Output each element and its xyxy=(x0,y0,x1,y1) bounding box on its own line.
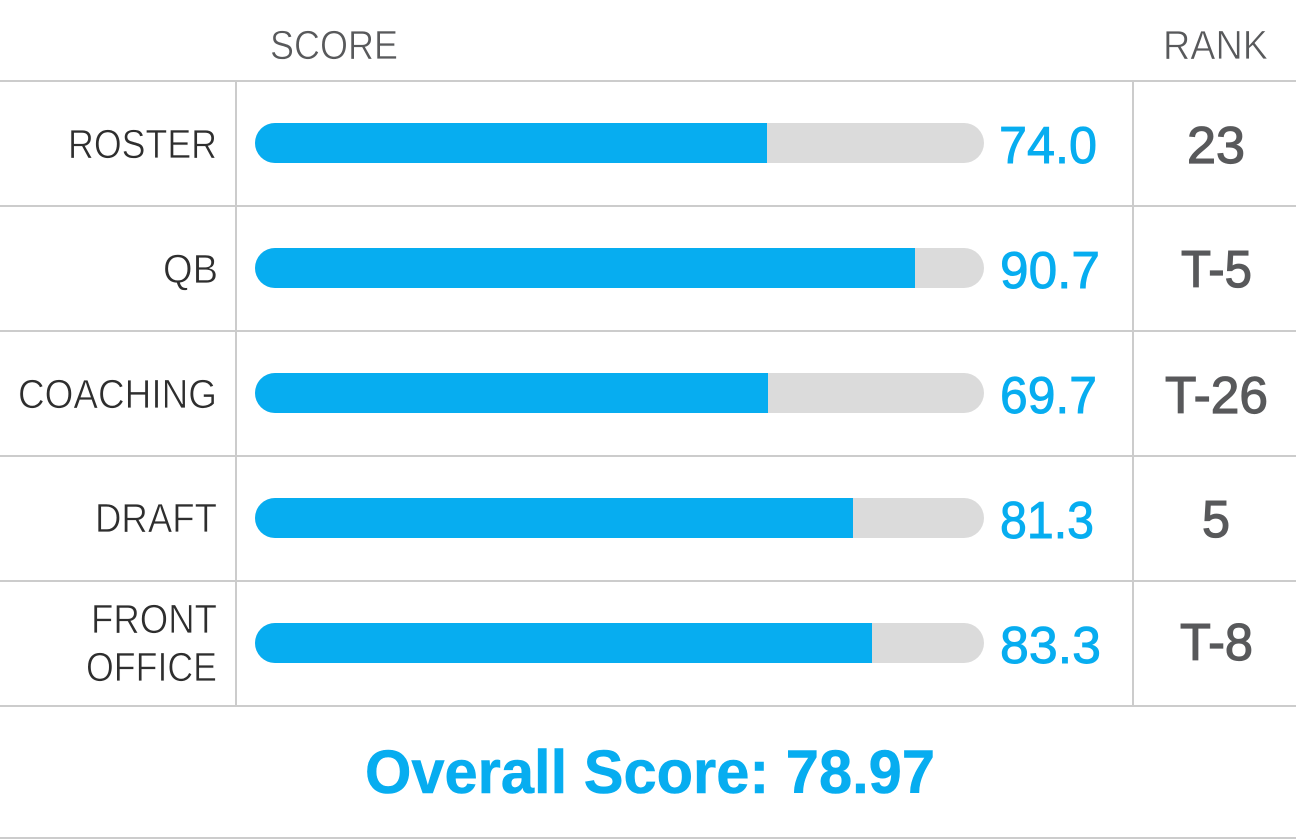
row: QB: 90.7 xyxy=(1000,242,1100,300)
row: roster xyxy=(68,117,1245,175)
row: QB: T-5 xyxy=(1181,241,1252,299)
row: roster: 23 xyxy=(1187,117,1245,175)
overall score: Overall Score: 78.97 xyxy=(365,738,935,807)
row: coaching xyxy=(18,367,1268,425)
row: QB xyxy=(163,241,1252,300)
row: draft xyxy=(95,491,1230,550)
row: front office: OFFICE xyxy=(86,644,217,690)
row: coaching: 69.7 xyxy=(1000,367,1097,425)
row: front office: T-8 xyxy=(1180,614,1253,672)
row: front office xyxy=(86,596,1253,690)
row: QB: QB xyxy=(163,246,218,292)
heading: rank column: RANK xyxy=(1163,22,1268,68)
row: draft: DRAFT xyxy=(95,495,217,541)
row: draft: 81.3 xyxy=(1000,492,1094,550)
row: front office: FRONT xyxy=(91,596,217,642)
row: coaching: T-26 xyxy=(1165,367,1268,425)
row: roster: 74.0 xyxy=(999,117,1097,175)
row: roster: ROSTER xyxy=(68,121,217,167)
heading: score column: SCORE xyxy=(270,22,398,68)
row: front office: 83.3 xyxy=(1000,617,1101,675)
row: draft: 5 xyxy=(1202,491,1230,549)
row: coaching: COACHING xyxy=(18,371,217,417)
